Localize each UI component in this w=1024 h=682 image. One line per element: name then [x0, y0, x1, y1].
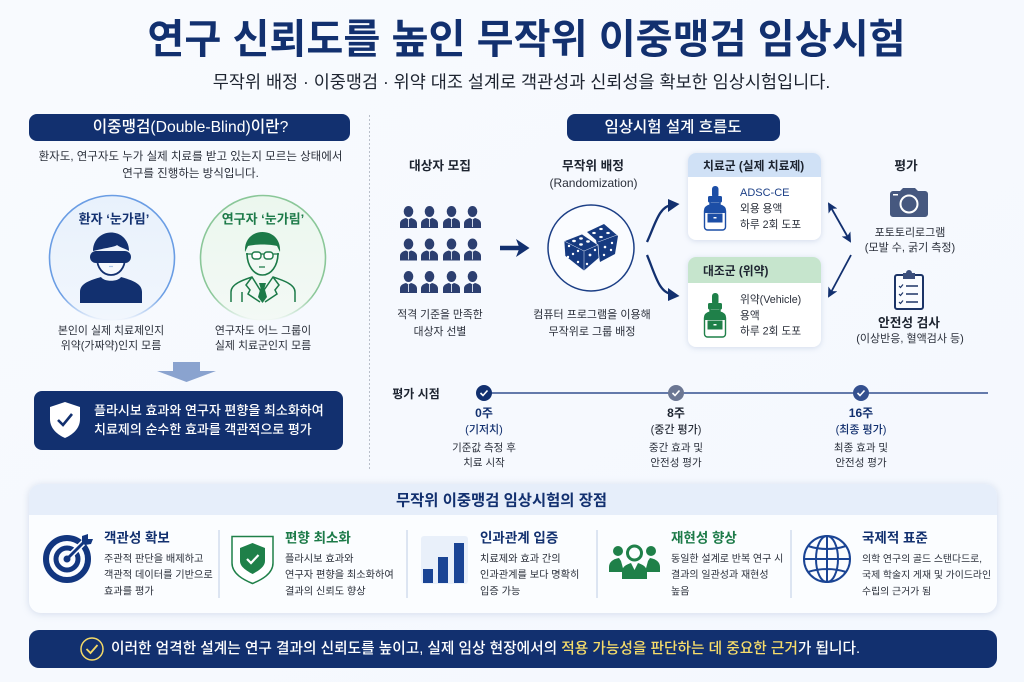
icon: target [46, 534, 93, 580]
card: treatment group: ADSC-CE [740, 187, 790, 199]
researcher caption [215, 324, 311, 352]
icon: researcher with glasses [231, 232, 295, 303]
card: control group: 대조군 (위약) [703, 264, 768, 278]
definition text [39, 150, 342, 180]
advantage: bias minimisation: 편향 최소화 [285, 530, 351, 546]
patient caption: 본인이 실제 치료제인지 [58, 324, 164, 337]
icon: clipboard [895, 270, 923, 309]
definition text: 연구를 진행하는 방식입니다. [122, 166, 259, 180]
evaluation column: (모발 수, 굵기 측정) [865, 241, 955, 254]
milestone: week 8: (중간 평가) [651, 423, 701, 436]
icon: green shield [232, 536, 273, 584]
heading: double-blind [29, 114, 350, 141]
researcher caption: 실제 치료군인지 모름 [215, 339, 311, 352]
card: treatment group [688, 153, 821, 240]
advantage: international standard: 국제적 표준 [862, 530, 928, 546]
callout: bias minimised: 플라시보 효과와 연구자 편향을 최소화하여 [94, 403, 324, 418]
patient blind circle [50, 196, 174, 320]
heading: flow [567, 114, 780, 141]
researcher blind circle [200, 196, 326, 320]
icon: shield check [50, 402, 80, 438]
icon: dice [564, 224, 618, 271]
advantage: international standard [804, 530, 991, 598]
step: recruitment: 적격 기준을 만족한 [397, 308, 483, 321]
heading: double-blind: 이중맹검(Double-Blind)이란? [93, 118, 289, 136]
advantage: reproducibility [609, 530, 783, 598]
advantage: reproducibility: 높음 [671, 586, 689, 598]
step: randomization [533, 159, 651, 338]
step: randomization: (Randomization) [549, 176, 638, 190]
advantage: bias minimisation: 플라시보 효과와 [285, 553, 354, 565]
advantage: causality: 인과관계를 보다 명확히 [480, 569, 579, 581]
advantage: international standard: 수립의 근거가 됨 [862, 584, 931, 598]
advantage: international standard: 국제 학술지 게재 및 가이드라인 [862, 569, 991, 581]
advantage: reproducibility: 결과의 일관성과 재현성 [671, 569, 769, 581]
heading: advantages: 무작위 이중맹검 임상시험의 장점 [396, 492, 607, 510]
advantage: bias minimisation [232, 530, 394, 598]
patient caption [58, 324, 164, 352]
subtitle: 무작위 배정 · 이중맹검 · 위약 대조 설계로 객관성과 신뢰성을 확보한 임상시험입니다. [213, 72, 830, 92]
advantage: causality [421, 530, 579, 598]
milestone: week 8: 중간 효과 및 [649, 442, 703, 454]
milestone: week 0: 치료 시작 [463, 457, 505, 469]
advantage: reproducibility: 재현성 향상 [671, 530, 737, 546]
milestone: week 0: 0주 [475, 406, 493, 420]
milestone: week 8 [649, 385, 703, 469]
step: randomization: 무작위 배정 [562, 159, 624, 173]
icon: blue dropper bottle [704, 186, 726, 230]
arrow: randomization to control [647, 255, 680, 301]
advantage: causality: 입증 가능 [480, 584, 520, 598]
panel: advantages [29, 484, 997, 613]
timeline: evaluation points: 평가 시점 [392, 386, 440, 401]
icon: green dropper bottle [704, 293, 726, 337]
conclusion banner [29, 630, 997, 668]
timeline: evaluation points [392, 385, 988, 469]
title: 연구 신뢰도를 높인 무작위 이중맹검 임상시험 [147, 17, 906, 62]
evaluation column [856, 159, 964, 345]
definition text: 환자도, 연구자도 누가 실제 치료를 받고 있는지 모르는 상태에서 [39, 150, 342, 163]
icon: globe [804, 536, 850, 582]
evaluation column: 안전성 검사 [878, 316, 940, 330]
milestone: week 8: 8주 [667, 406, 685, 420]
advantage: objectivity: 객관적 데이터를 기반으로 [104, 569, 213, 581]
advantage: reproducibility: 동일한 설계로 반복 연구 시 [671, 553, 783, 565]
milestone: week 16: 최종 효과 및 [834, 442, 888, 454]
milestone: week 0 [452, 385, 516, 469]
card: control group: 용액 [740, 310, 760, 322]
evaluation column: (이상반응, 혈액검사 등) [856, 331, 964, 345]
step: recruitment: 대상자 모집 [409, 159, 471, 173]
card: treatment group: 외용 용액 [740, 203, 782, 215]
step: randomization: 컴퓨터 프로그램을 이용해 [533, 307, 651, 321]
icon: blindfolded patient [80, 232, 142, 303]
advantage: causality: 치료제와 효과 간의 [480, 553, 561, 565]
researcher blind circle: 연구자 ‘눈가림’ [222, 212, 304, 226]
arrow: randomization to treatment [647, 199, 680, 242]
advantage: objectivity: 객관성 확보 [104, 530, 170, 546]
milestone: week 16: (최종 평가) [836, 422, 886, 436]
researcher caption: 연구자도 어느 그룹이 [215, 324, 311, 337]
icon: participants grid [400, 206, 481, 293]
panel: trial design flow [397, 114, 964, 347]
advantage: objectivity [46, 530, 213, 598]
evaluation column: 포토토리로그램 [875, 226, 945, 239]
card: control group: 하루 2회 도포 [740, 324, 801, 338]
milestone: week 8: 안전성 평가 [650, 457, 702, 469]
milestone: week 16: 16주 [849, 406, 873, 420]
card: control group [688, 257, 821, 347]
advantage: bias minimisation: 연구자 편향을 최소화하여 [285, 568, 394, 581]
arrow: recruitment to randomization [500, 239, 530, 257]
conclusion banner: 이러한 엄격한 설계는 연구 결과의 신뢰도를 높이고, 실제 임상 현장에서의 적용 가능성을 판단하는 데 중요한 근거가 됩니다. [111, 640, 860, 657]
milestone: week 16: 안전성 평가 [835, 457, 887, 469]
advantage: objectivity: 주관적 판단을 배제하고 [104, 552, 203, 565]
icon: check circle [81, 638, 103, 660]
advantage: objectivity: 효과를 평가 [104, 586, 154, 598]
arrow: down [157, 362, 216, 382]
milestone: week 0: 기준값 측정 후 [452, 442, 516, 454]
advantage: international standard: 의학 연구의 골드 스탠다드로, [862, 553, 982, 565]
callout: bias minimised: 치료제의 순수한 효과를 객관적으로 평가 [94, 422, 312, 437]
icon: green team [609, 546, 660, 579]
advantage: bias minimisation: 결과의 신뢰도 향상 [285, 586, 366, 598]
patient blind circle: 환자 ‘눈가림’ [79, 212, 149, 226]
step: recruitment [397, 159, 483, 338]
advantage: causality: 인과관계 입증 [480, 530, 558, 546]
card: treatment group: 치료군 (실제 치료제) [703, 159, 804, 173]
patient caption: 위약(가짜약)인지 모름 [61, 338, 161, 352]
step: recruitment: 대상자 선별 [414, 325, 466, 338]
callout: bias minimised [34, 391, 343, 450]
evaluation column: 평가 [894, 159, 918, 173]
card: control group: 위약(Vehicle) [740, 293, 801, 306]
step: randomization: 무작위로 그룹 배정 [548, 325, 636, 338]
panel: double-blind definition [29, 114, 350, 450]
icon: bar chart [421, 536, 468, 584]
card: treatment group: 하루 2회 도포 [740, 218, 801, 231]
milestone: week 0: (기저치) [465, 423, 503, 436]
icon: camera [890, 188, 928, 217]
milestone: week 16 [834, 385, 888, 469]
heading: flow: 임상시험 설계 흐름도 [605, 118, 741, 136]
arrow: evaluation to control [829, 255, 851, 296]
arrow: evaluation to treatment [829, 204, 850, 241]
